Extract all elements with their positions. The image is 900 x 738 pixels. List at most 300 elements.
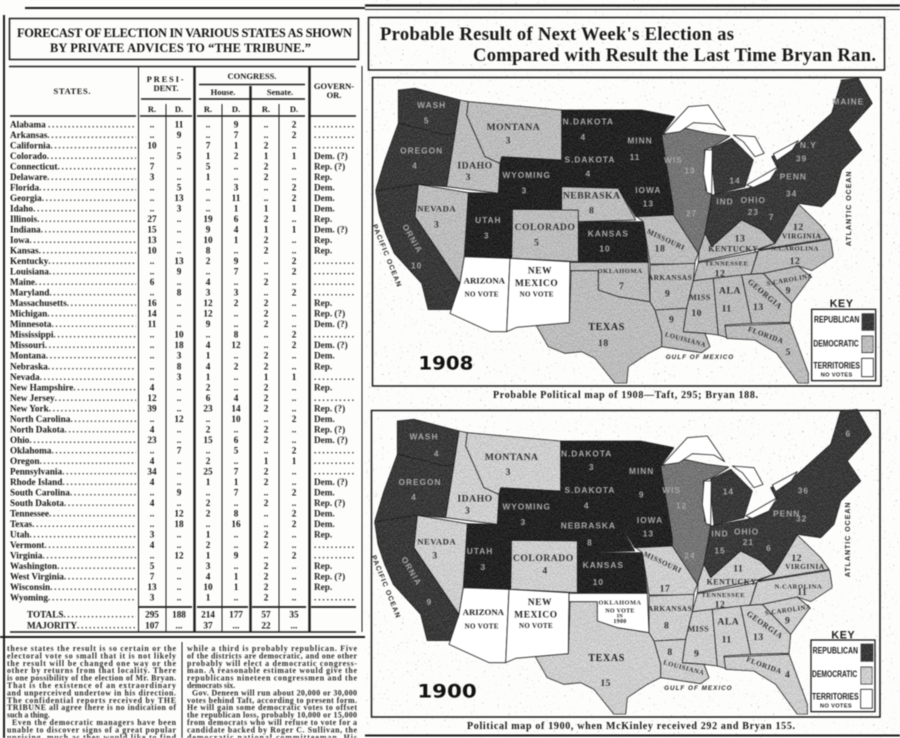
- senate democratic column: 2: [292, 256, 297, 266]
- text block: article left column: The confidential reports received by THE: [7, 696, 176, 705]
- president republican column: 34: [147, 466, 157, 476]
- house republican column: ..: [206, 488, 210, 498]
- president republican column: 4: [150, 456, 155, 466]
- governor column: [314, 119, 354, 603]
- state labels 1908: FLORIDA: [747, 324, 785, 346]
- president republican column: 39: [147, 403, 157, 413]
- state labels 1900: MEXICO: [514, 610, 558, 620]
- president democratic column: 12: [174, 551, 184, 561]
- senate republican column: 2: [264, 403, 269, 413]
- senate republican column: 2: [264, 466, 269, 476]
- state labels 1908: 7: [619, 281, 624, 292]
- senate democratic column: ..: [292, 351, 296, 361]
- president republican column: ..: [150, 508, 154, 518]
- house republican column: ..: [206, 182, 210, 192]
- state labels 1908: 3: [522, 185, 527, 195]
- state labels 1908: COLORADO: [515, 222, 575, 233]
- governor column: Dem.: [314, 488, 335, 498]
- state labels 1908: 10: [691, 308, 702, 319]
- state names: Oklahoma.........................: [10, 445, 151, 455]
- president democratic column: 5: [177, 151, 182, 161]
- state labels 1900: TEXAS: [588, 653, 625, 664]
- house democratic column: 4: [234, 393, 239, 403]
- house democratic column: 2: [234, 151, 239, 161]
- house republican column: 4: [206, 277, 211, 287]
- senate republican column: 2: [264, 140, 269, 150]
- governor column: Rep.: [314, 246, 332, 256]
- house democratic column: ..: [234, 593, 238, 603]
- table header: D.: [290, 104, 298, 114]
- state names: Mississippi......................: [10, 330, 141, 340]
- text block: article right column: while a third is probably republican. Five: [187, 644, 357, 653]
- state labels 1900: WIS: [662, 485, 681, 495]
- house republican column: 4: [206, 361, 211, 371]
- senate republican column: ..: [264, 414, 268, 424]
- state labels 1908: 3: [506, 135, 511, 146]
- senate republican column: 2: [264, 246, 269, 256]
- senate democratic column: 35: [289, 610, 299, 620]
- state names: Rhode Island.....................: [10, 477, 146, 487]
- house republican column: 25: [203, 466, 213, 476]
- text block: article right column: republicans nineteen congressmen and the: [187, 674, 357, 683]
- house democratic column: 3: [234, 182, 239, 192]
- governor column: Dem. (?): [314, 477, 348, 487]
- house democratic column: 1: [234, 140, 239, 150]
- governor column: Rep.: [314, 214, 332, 224]
- president democratic column: ..: [177, 498, 181, 508]
- governor column: Dem. (?): [314, 319, 348, 329]
- senate democratic column: ..: [292, 561, 296, 571]
- state labels 1900: 32: [796, 514, 807, 524]
- state labels 1900: MISSOURI: [642, 549, 683, 575]
- state labels 1900: 9: [639, 490, 644, 500]
- table header: [54, 71, 354, 114]
- house republican column: 2: [206, 508, 211, 518]
- heading: forecast table title: BY PRIVATE ADVICES TO “THE TRIBUNE.”: [50, 41, 311, 55]
- senate republican column: ..: [264, 256, 268, 266]
- president democratic column: ..: [177, 435, 181, 445]
- state names: North Dakota.....................: [10, 424, 148, 434]
- state labels 1900: MINN: [629, 466, 654, 476]
- state names: Pennsylvania.....................: [10, 466, 146, 476]
- house democratic column: 5: [234, 445, 239, 455]
- senate democratic column: ..: [292, 319, 296, 329]
- state labels 1908: 10: [599, 244, 611, 254]
- house republican column: 5: [206, 161, 211, 171]
- president republican column: 15: [147, 224, 157, 234]
- state names: California.......................: [10, 140, 142, 150]
- house republican column: 1: [206, 172, 211, 182]
- table header: D.: [175, 104, 183, 114]
- state labels 1900: ARIZONA: [463, 607, 505, 617]
- president democratic column: 3: [177, 372, 182, 382]
- house democratic column: 1: [234, 204, 239, 214]
- state labels 1908: 39: [796, 154, 807, 164]
- senate democratic column: ..: [292, 530, 296, 540]
- president republican column: 11: [148, 319, 157, 329]
- house democratic column: 3: [234, 288, 239, 298]
- house republican column: 7: [206, 140, 211, 150]
- house democratic column: 11: [232, 193, 241, 203]
- senate republican column: 2: [264, 435, 269, 445]
- state labels 1900: COLORADO: [513, 553, 574, 564]
- state labels 1908: 13: [643, 199, 654, 209]
- state labels 1908: 23: [748, 207, 759, 217]
- state names: New Hampshire...................: [10, 382, 149, 392]
- house republican column: 10: [203, 582, 213, 592]
- state labels 1900: 4: [785, 669, 790, 680]
- house republican column: 2: [206, 540, 211, 550]
- president democratic column: ..: [177, 319, 181, 329]
- state names: Michigan.........................: [10, 309, 147, 319]
- governor column: ..........: [314, 267, 354, 277]
- senate republican column: ..: [264, 267, 268, 277]
- president republican column: ..: [150, 182, 154, 192]
- governor column: Dem. (?): [314, 151, 348, 161]
- heading: maps title: Compared with Result the Last Time Bryan Ran.: [473, 45, 876, 66]
- house republican column: 2: [206, 256, 211, 266]
- state labels 1908: PENN: [780, 172, 807, 182]
- house democratic column: 1: [234, 582, 239, 592]
- house democratic column: 1: [234, 572, 239, 582]
- state names: Louisiana........................: [10, 267, 145, 277]
- state labels 1908: MINN: [627, 135, 653, 145]
- state labels 1900: N.DAKOTA: [561, 448, 612, 458]
- state names: Kentucky.........................: [10, 256, 148, 266]
- key 1900: DEMOCRATIC: [812, 669, 858, 679]
- state names: Washington.......................: [10, 561, 149, 571]
- house republican column: 6: [206, 393, 211, 403]
- house republican column: ..: [206, 519, 210, 529]
- key 1900: TERRITORIES: [812, 692, 859, 702]
- house republican column: 1: [206, 530, 211, 540]
- oklahoma no vote label: NO VOTE: [605, 609, 635, 615]
- president democratic column: ..: [177, 298, 181, 308]
- senate republican column: 1: [264, 204, 269, 214]
- text block: article right column: of the districts are democratic, and one other: [187, 651, 357, 660]
- state labels 1908: 4: [581, 132, 586, 142]
- house republican column: 1: [206, 372, 211, 382]
- senate democratic column: 2: [292, 414, 297, 424]
- president republican column: 16: [147, 298, 157, 308]
- state labels 1900: MISS: [688, 625, 709, 634]
- state labels 1900: 15: [600, 678, 611, 689]
- ocean labels 1900: PACIFIC OCEAN: [369, 554, 401, 620]
- state names: Kansas...........................: [10, 246, 147, 256]
- state labels 1900: MONTANA: [485, 452, 539, 463]
- state labels 1900: 11: [722, 635, 732, 646]
- senate democratic column: ...: [291, 620, 297, 630]
- senate democratic column: ..: [292, 235, 296, 245]
- state names: West Virginia....................: [10, 572, 144, 582]
- state labels 1900: PENN: [773, 508, 800, 518]
- president democratic column: 7: [177, 445, 182, 455]
- senate republican column: 2: [264, 582, 269, 592]
- house democratic column: 16: [231, 519, 241, 529]
- governor column: Rep.: [314, 172, 332, 182]
- house republican column: 2: [206, 382, 211, 392]
- governor column: Dem.: [314, 519, 335, 529]
- state labels 1908: 5: [786, 347, 791, 358]
- state labels 1900: 15: [714, 545, 726, 555]
- president republican column: 4: [150, 498, 155, 508]
- governor column: Rep.: [314, 361, 332, 371]
- president republican column: ..: [150, 445, 154, 455]
- state labels 1908: 34: [786, 189, 797, 199]
- table header: Senate.: [267, 87, 293, 97]
- state labels 1908: 10: [411, 260, 422, 270]
- state names: Maine.............................: [10, 277, 151, 287]
- governor column: Rep. (?): [314, 498, 345, 508]
- text block: article right column: [187, 644, 357, 738]
- state labels 1900: NEBRASKA: [561, 521, 616, 531]
- text block: article left column: [7, 644, 177, 738]
- year: 1900: 1900: [417, 682, 477, 703]
- president democratic column: 10: [174, 330, 184, 340]
- state labels 1900: LOUISIANA: [662, 659, 705, 677]
- governor column: Dem. (?): [314, 224, 348, 234]
- house democratic column: 2: [234, 361, 239, 371]
- state names: Wyoming..........................: [10, 593, 152, 603]
- president democratic column: ..: [177, 214, 181, 224]
- ocean labels 1908: [370, 171, 853, 361]
- house democratic column: 7: [234, 267, 239, 277]
- state names: MAJORITY....................: [27, 620, 157, 630]
- state labels 1900: KENTUCKY: [707, 577, 757, 586]
- state labels 1900: 6: [846, 429, 851, 439]
- table header: House.: [211, 87, 235, 97]
- state names: Tennessee........................: [10, 508, 145, 518]
- senate democratic column: ..: [292, 498, 296, 508]
- president republican column: ..: [150, 256, 154, 266]
- president republican column: 3: [150, 593, 155, 603]
- state labels 1908: 13: [753, 302, 764, 313]
- solid republican states 1908: [464, 110, 675, 262]
- state names: Montana..........................: [10, 351, 150, 361]
- president democratic column: 12: [174, 508, 184, 518]
- ocean labels 1900: [369, 502, 852, 692]
- article rule: [0, 636, 365, 638]
- president democratic column: ..: [177, 309, 181, 319]
- president democratic column: 3: [177, 204, 182, 214]
- senate republican column: [261, 119, 271, 631]
- senate democratic column: ..: [292, 393, 296, 403]
- house republican column: ..: [206, 119, 210, 129]
- senate republican column: 1: [264, 224, 269, 234]
- governor column: Rep. (?): [314, 424, 345, 434]
- state labels 1908: 3: [466, 172, 471, 183]
- state labels 1900: NEW: [528, 598, 552, 608]
- house democratic column: 9: [234, 551, 239, 561]
- president democratic column: ..: [177, 382, 181, 392]
- house republican column: ..: [206, 330, 210, 340]
- senate republican column: 2: [264, 361, 269, 371]
- president democratic column: 12: [174, 414, 184, 424]
- senate democratic column: ..: [292, 309, 296, 319]
- state labels 1900: 9: [694, 649, 699, 660]
- house democratic column: ..: [234, 540, 238, 550]
- house republican column: 12: [203, 309, 213, 319]
- president democratic column: 188: [172, 610, 186, 620]
- senate republican column: 2: [264, 298, 269, 308]
- senate republican column: 2: [264, 530, 269, 540]
- state labels 1908: MEXICO: [515, 279, 558, 289]
- senate democratic column: 2: [292, 340, 297, 350]
- house democratic column: 177: [229, 610, 243, 620]
- senate republican column: 2: [264, 561, 269, 571]
- table header: R.: [204, 104, 212, 114]
- senate democratic column: 2: [292, 182, 297, 192]
- text block: article right column: Gov. Deneen will run about 20,000 or 30,000: [192, 688, 357, 697]
- president democratic column: ..: [177, 140, 181, 150]
- caption: 1908 map: Probable Political map of 1908—Taft, 295; Bryan 188.: [493, 390, 758, 401]
- president democratic column: ..: [177, 224, 181, 234]
- president republican column: 6: [150, 277, 155, 287]
- text block: article right column: candidate backed by Roger C. Sullivan, the: [187, 725, 357, 734]
- house democratic column: ..: [234, 309, 238, 319]
- senate democratic column: ..: [292, 572, 296, 582]
- state labels 1908: 9: [669, 315, 674, 326]
- great lakes 1908: [663, 105, 798, 194]
- table grid: [9, 66, 356, 632]
- senate republican column: 2: [264, 277, 269, 287]
- governor column: Dem.: [314, 182, 335, 192]
- text block: article left column: That is the existence of an extraordinary: [7, 681, 176, 690]
- oklahoma no vote label: OKLAHOMA: [598, 599, 642, 606]
- map: 1900: [369, 409, 875, 714]
- state labels 1900: WYOMING: [502, 502, 551, 512]
- house democratic column: 10: [231, 414, 241, 424]
- state labels 1908: N.Y: [800, 140, 817, 150]
- state labels 1900: 3: [481, 562, 486, 572]
- house democratic column: 7: [234, 488, 239, 498]
- state labels 1908: 5: [534, 238, 539, 249]
- governor column: ..........: [314, 466, 354, 476]
- house republican column: 2: [206, 498, 211, 508]
- president republican column: ..: [150, 151, 154, 161]
- house democratic column: 7: [234, 466, 239, 476]
- state names: Florida..........................: [10, 182, 143, 192]
- president republican column: ..: [150, 267, 154, 277]
- house democratic column: ..: [234, 382, 238, 392]
- state labels 1908: OKLAHOMA: [597, 268, 643, 275]
- republican states 1900: [375, 409, 871, 641]
- governor column: Rep. (?): [314, 161, 345, 171]
- president democratic column: 18: [174, 519, 184, 529]
- house republican column: [201, 119, 215, 631]
- state labels 1908: VIRGINIA: [782, 231, 822, 240]
- president democratic column: ..: [177, 403, 181, 413]
- text block: article left column: is one possibility of the election of Mr. Bryan.: [7, 674, 176, 683]
- state labels 1908: N.CAROLINA: [771, 246, 819, 253]
- president republican column: 4: [150, 540, 155, 550]
- key 1908: REPUBLICAN: [814, 315, 859, 325]
- state labels 1908: NO VOTE: [465, 291, 499, 299]
- senate democratic column: 2: [292, 119, 297, 129]
- state labels 1900: IND: [711, 528, 729, 538]
- state labels 1900: 11: [797, 587, 807, 598]
- state labels 1900: 4: [542, 565, 548, 576]
- state labels 1908: 11: [722, 304, 732, 315]
- president democratic column: ..: [177, 277, 181, 287]
- state labels 1908: TEXAS: [588, 322, 625, 333]
- text block: article left column: unable to discover signs of a great popular: [7, 725, 176, 734]
- state labels 1908: IDAHO: [457, 160, 493, 171]
- state labels 1900: NO VOTE: [519, 622, 553, 630]
- governor column: ..........: [314, 256, 354, 266]
- senate republican column: ..: [264, 182, 268, 192]
- state labels 1900: 13: [753, 632, 764, 643]
- house democratic column: ..: [234, 277, 238, 287]
- senate republican column: 2: [264, 214, 269, 224]
- president republican column: 7: [150, 572, 155, 582]
- senate republican column: 2: [264, 382, 269, 392]
- governor column: Rep. (?): [314, 309, 345, 319]
- key 1900: KEY: [831, 630, 855, 642]
- state labels 1908: MONTANA: [486, 122, 540, 133]
- president democratic column: ..: [177, 424, 181, 434]
- senate democratic column: 2: [292, 267, 297, 277]
- state labels 1900: S.CAROLINA: [765, 604, 812, 617]
- president republican column: ..: [150, 414, 154, 424]
- president republican column: 3: [150, 172, 155, 182]
- state labels 1900: KANSAS: [583, 560, 624, 570]
- table header: R.: [262, 104, 270, 114]
- text block: article left column: and unperceived undertow in his direction.: [7, 688, 176, 697]
- president republican column: ..: [150, 288, 154, 298]
- state labels 1900: NO VOTE: [465, 622, 499, 630]
- state labels 1908: 4: [412, 160, 418, 170]
- text block: article right column: man. A reasonable estimate would give the: [187, 666, 357, 675]
- governor column: Rep. (?): [314, 403, 345, 413]
- governor column: ..........: [314, 540, 354, 550]
- house republican column: 214: [201, 610, 215, 620]
- table header: OR.: [327, 90, 341, 100]
- president democratic column: ..: [177, 561, 181, 571]
- house democratic column: ..: [234, 372, 238, 382]
- democratic states 1908: [415, 100, 833, 383]
- state labels 1900: ARKANSAS: [648, 604, 692, 613]
- oklahoma no vote label: [598, 599, 642, 625]
- ocean labels 1908: ATLANTIC OCEAN: [846, 171, 853, 246]
- state labels 1908: ARKANSAS: [648, 273, 692, 282]
- president republican column: 5: [150, 561, 155, 571]
- state labels 1900: 11: [733, 564, 743, 575]
- state labels 1900: ALA: [717, 616, 739, 627]
- president republican column: ..: [150, 372, 154, 382]
- state labels 1900: 3: [506, 467, 511, 478]
- text block: article left column: other by returns from that locality. There: [7, 666, 176, 675]
- house republican column: ..: [206, 130, 210, 140]
- state names: TOTALS......................: [27, 610, 151, 620]
- house democratic column: ..: [234, 498, 238, 508]
- text block: article left column: these states the result is so certain or the: [7, 644, 176, 653]
- president democratic column: ..: [177, 593, 181, 603]
- table: forecast by state: [9, 66, 356, 632]
- state labels 1908: N.DAKOTA: [563, 117, 614, 127]
- state names: Iowa..............................: [10, 235, 149, 245]
- house republican column: ..: [206, 193, 210, 203]
- state names: Vermont..........................: [10, 540, 148, 550]
- state labels 1900: WASH: [410, 432, 438, 442]
- state names: Colorado.........................: [10, 151, 147, 161]
- heading: forecast table title: [10, 18, 358, 60]
- state labels 1908: MAINE: [832, 97, 864, 107]
- key 1908: NO VOTES: [821, 372, 853, 378]
- state labels 1900: ORNIA: [399, 555, 424, 587]
- state labels 1908: GEORGIA: [746, 277, 784, 311]
- senate democratic column: 2: [292, 508, 297, 518]
